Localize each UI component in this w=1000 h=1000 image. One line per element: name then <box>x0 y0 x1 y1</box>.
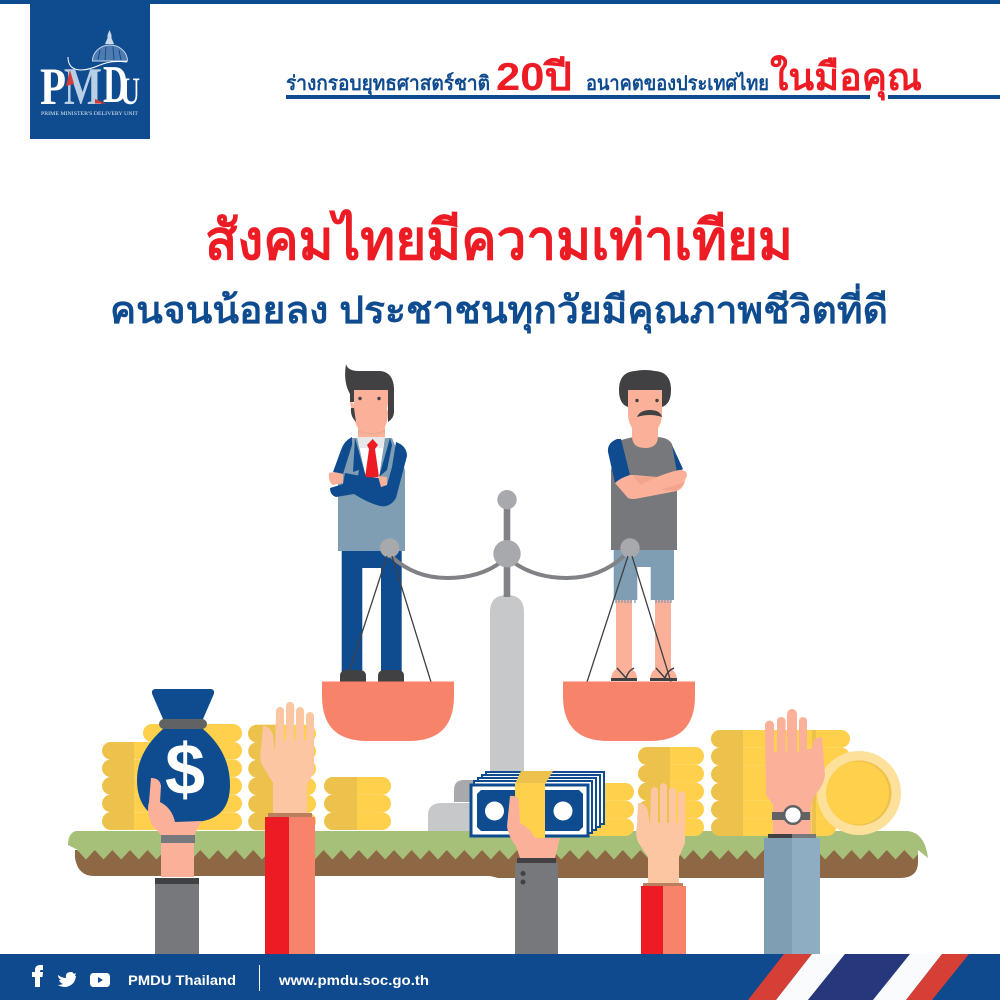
crossed arms <box>615 470 687 499</box>
raised hand with red sleeve <box>260 702 315 954</box>
hand <box>260 702 314 813</box>
watch face <box>784 806 802 824</box>
icon: facebook <box>32 965 43 987</box>
hand <box>148 778 201 877</box>
logo letters <box>40 56 140 116</box>
coin stacks: right <box>580 730 901 836</box>
sleeve <box>515 863 558 954</box>
header tagline: 20ปี <box>496 56 572 99</box>
logo tagline: PRIME MINISTER'S DELIVERY UNIT <box>41 112 138 117</box>
hair <box>619 370 671 407</box>
villager figure <box>608 370 687 681</box>
stack 1 <box>102 724 242 830</box>
stack behind cash <box>580 783 634 836</box>
stack tall <box>711 730 850 836</box>
sleeve <box>155 884 199 954</box>
cuff <box>517 858 556 863</box>
hand <box>765 709 825 834</box>
neck <box>632 428 658 448</box>
title: สังคมไทยมีความเท่าเทียม <box>205 208 793 271</box>
paper band <box>515 771 553 784</box>
logo letters: D <box>103 56 128 114</box>
salmon half <box>663 886 686 954</box>
stem <box>504 505 510 597</box>
red half <box>265 817 289 954</box>
shirt <box>357 437 385 478</box>
header tagline: ร่างกรอบยุทธศาสตร์ชาติ <box>286 72 490 96</box>
sleeves <box>608 439 683 483</box>
cuff <box>155 878 199 884</box>
cuff <box>268 813 312 817</box>
raised hand with watch <box>764 709 825 954</box>
right pan <box>563 682 695 741</box>
stack 2 <box>248 725 316 830</box>
raised hand centre right <box>636 783 686 954</box>
subtitle: คนจนน้อยลง ประชาชนทุกวัยมีคุณภาพชีวิตที่ดี <box>110 283 888 334</box>
logo letters: M <box>64 58 102 116</box>
bag band <box>159 719 207 729</box>
dollar sign: $ <box>165 730 205 810</box>
jacket lapels and arms <box>353 438 392 477</box>
icon: youtube <box>90 973 110 987</box>
arm shading <box>633 476 685 491</box>
logo letters: P <box>40 58 66 116</box>
moustache <box>637 410 662 417</box>
pillar <box>490 595 524 790</box>
logo: PMDU <box>30 4 150 139</box>
header tagline: อนาคตของประเทศไทย <box>586 71 769 95</box>
coin stacks: left <box>102 724 391 830</box>
shirt <box>611 437 677 550</box>
stacked notes <box>474 772 604 833</box>
big coin <box>817 751 901 835</box>
tie <box>365 439 379 478</box>
eyes <box>635 399 659 402</box>
head <box>628 390 662 432</box>
buttons <box>520 871 526 884</box>
scale base <box>454 780 560 802</box>
stack middle <box>638 747 704 836</box>
header tagline <box>286 55 922 101</box>
hand <box>507 796 560 858</box>
trousers <box>342 551 402 672</box>
salmon half <box>289 817 315 954</box>
icon: dome <box>68 30 128 70</box>
bag body <box>137 689 230 822</box>
vest <box>338 438 405 551</box>
footer website: www.pmdu.soc.go.th <box>278 972 429 988</box>
icon: twitter <box>58 972 76 987</box>
flag stripes <box>748 954 969 1000</box>
balance scale <box>322 490 695 834</box>
legs <box>616 600 671 675</box>
eyes <box>358 397 381 400</box>
sleeve left <box>764 838 792 954</box>
cuff <box>643 883 683 886</box>
balls <box>380 490 640 567</box>
logo letters: U <box>120 70 140 113</box>
watch strap <box>772 812 810 820</box>
hands <box>329 472 387 487</box>
front note <box>471 785 588 836</box>
ropes <box>392 556 624 578</box>
wristband <box>161 835 195 843</box>
strings <box>346 556 671 682</box>
footer bar <box>0 954 1000 1000</box>
footer name: PMDU Thailand <box>128 972 236 988</box>
sleeve right <box>792 838 820 954</box>
hair <box>345 364 394 422</box>
money bag <box>137 689 230 822</box>
stack 3 <box>324 777 391 830</box>
header tagline: ในมือคุณ <box>770 55 922 101</box>
ground <box>68 831 928 878</box>
hand holding notes <box>507 796 560 954</box>
businessman figure <box>329 364 407 682</box>
head <box>350 390 392 432</box>
left pan <box>322 682 454 741</box>
feet and sandals <box>611 668 677 679</box>
banknotes <box>471 771 604 838</box>
header rule <box>286 95 1000 99</box>
red half <box>641 886 663 954</box>
neck <box>358 425 385 437</box>
hand <box>636 783 685 883</box>
top bar <box>0 0 1000 4</box>
cuff <box>768 834 816 838</box>
shoes <box>340 670 404 682</box>
hand holding bag <box>148 778 201 954</box>
shorts <box>614 550 674 600</box>
